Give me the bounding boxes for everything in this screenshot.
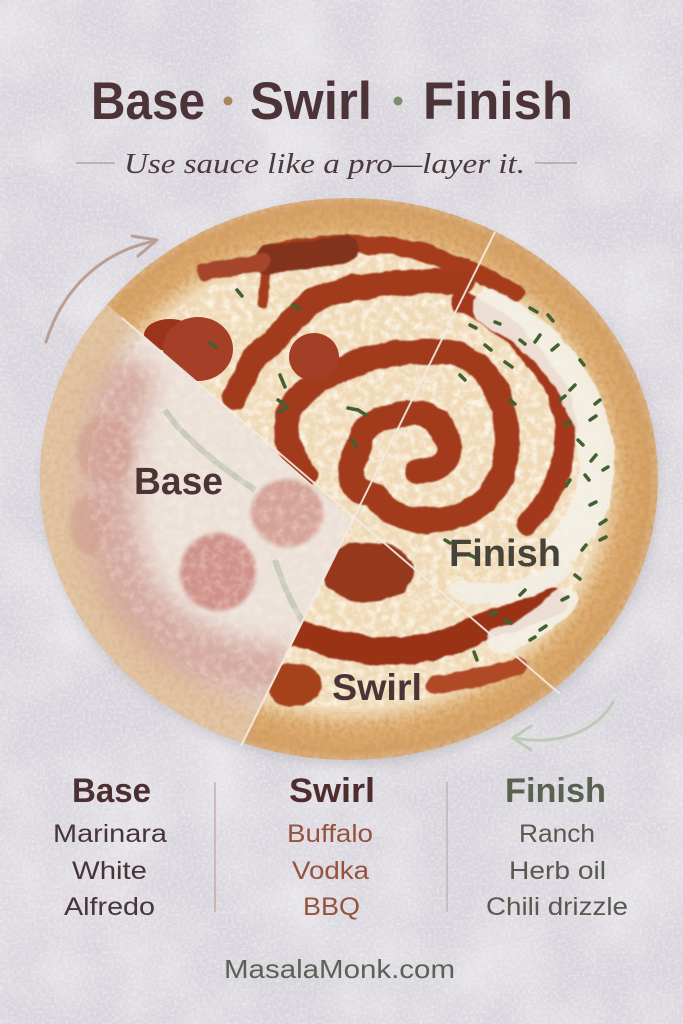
title	[91, 72, 573, 131]
column: Swirl: Buffalo	[287, 820, 373, 848]
website credit: MasalaMonk.com	[224, 954, 455, 984]
column: Swirl	[287, 772, 375, 921]
sauce blobs and pepperoni	[144, 317, 414, 707]
column: Base: Marinara	[53, 820, 167, 848]
herb flecks	[210, 290, 608, 660]
column: Finish: Finish	[505, 772, 606, 810]
arrow: bottom right	[513, 702, 613, 750]
pizza label: Finish: Finish	[449, 533, 561, 575]
column: Finish: Chili drizzle	[486, 893, 628, 921]
sauce spiral	[205, 244, 566, 685]
arrow: top left	[46, 236, 157, 342]
column: Finish: Ranch	[519, 820, 595, 848]
crust toasted texture	[65, 221, 633, 737]
faded pepperoni	[180, 533, 256, 611]
column: Swirl: Vodka	[292, 857, 369, 885]
column: Base: White	[72, 857, 147, 885]
slice cut lines	[122, 232, 560, 746]
ranch drizzle	[460, 308, 597, 640]
pizza label: Swirl: Swirl	[332, 667, 422, 708]
pizza	[40, 198, 658, 764]
column: Finish	[486, 772, 628, 921]
column: Base: Alfredo	[64, 893, 155, 921]
pizza label: Base: Base	[134, 461, 223, 503]
column: Swirl: Swirl	[289, 772, 375, 810]
column: Swirl: BBQ	[303, 893, 360, 921]
column: Finish: Herb oil	[509, 857, 606, 885]
faded sauce ring	[107, 385, 270, 672]
pizza crust	[40, 198, 658, 760]
base slice frosted overlay	[40, 304, 352, 743]
title: Base	[91, 72, 205, 131]
subtitle: Use sauce like a pro—layer it.	[124, 149, 525, 180]
column: Base	[53, 772, 167, 921]
column: Base: Base	[72, 772, 151, 810]
pizza cheese	[87, 243, 611, 715]
title: Finish	[423, 72, 573, 131]
title: Swirl	[250, 72, 372, 131]
